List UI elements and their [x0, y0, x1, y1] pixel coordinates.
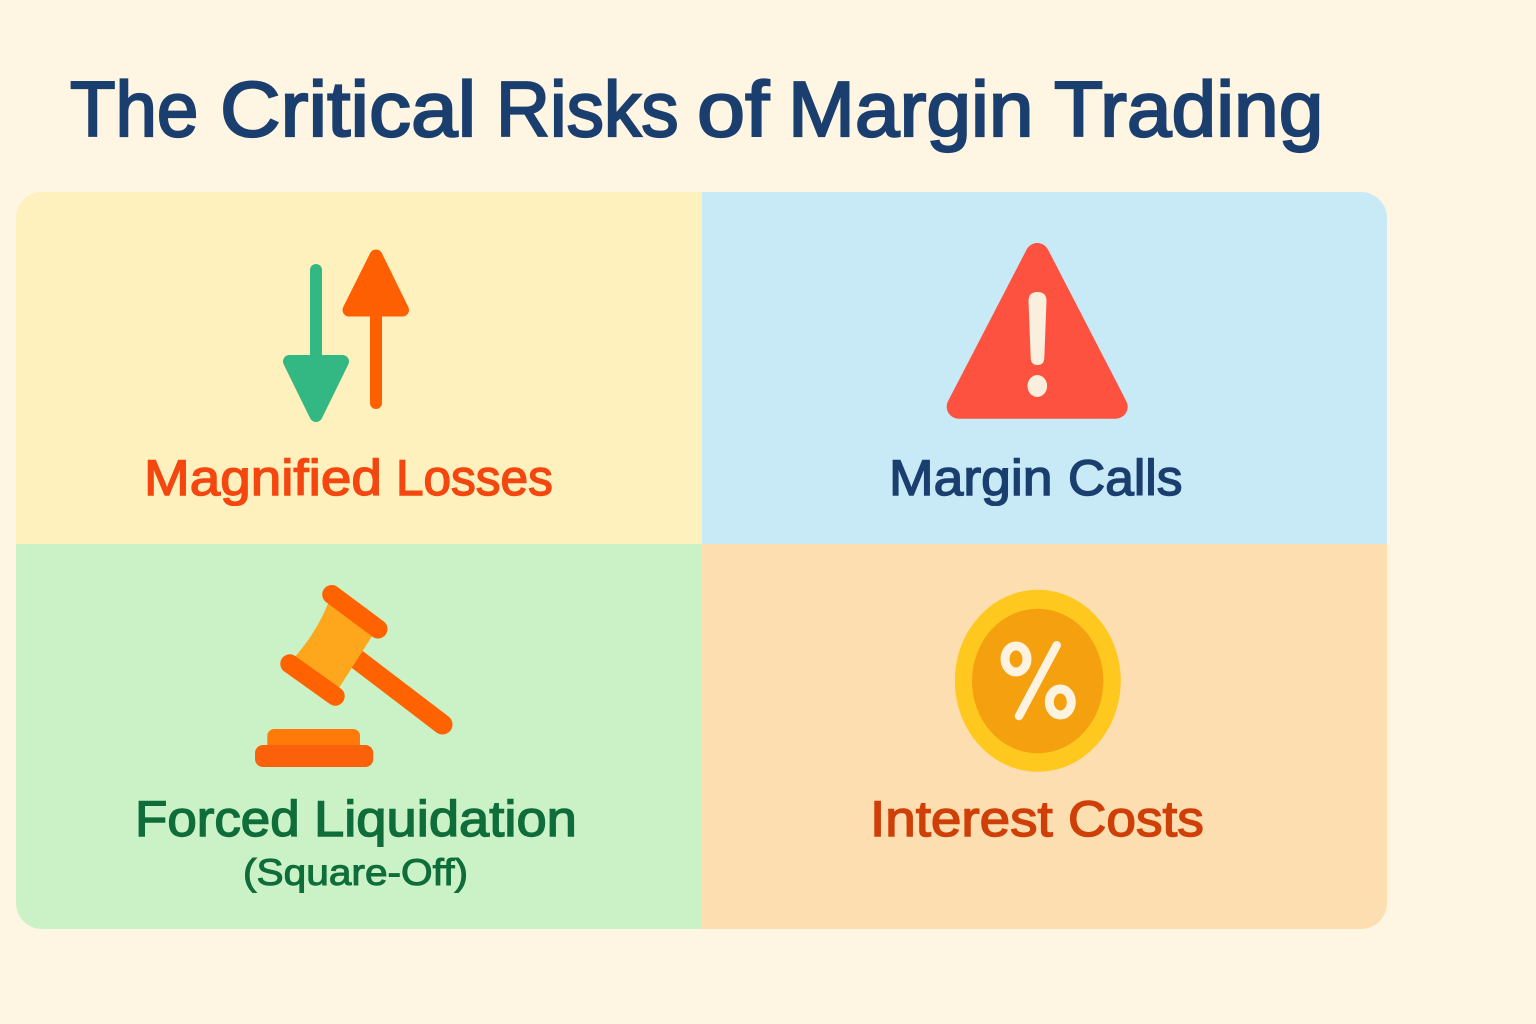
- heading: magnified losses: Losses: [396, 450, 553, 506]
- heading: margin calls: Calls: [1068, 450, 1182, 506]
- title: Critical: [220, 65, 476, 153]
- icon: warning triangle: [946, 243, 1128, 419]
- title: Margin: [788, 65, 1034, 153]
- heading: forced liquidation: Forced: [134, 791, 299, 847]
- heading: margin calls: [889, 450, 1182, 506]
- panel: risk grid: [16, 192, 1387, 929]
- title: Trading: [1054, 65, 1323, 153]
- heading: margin calls: Margin: [889, 450, 1053, 506]
- heading: forced liquidation: [134, 791, 577, 847]
- title: Risks: [496, 65, 679, 153]
- panel: margin calls: [702, 192, 1387, 544]
- title: [70, 65, 1323, 154]
- title: of: [697, 65, 769, 153]
- icon: up and down arrows: [283, 250, 409, 422]
- heading: interest costs: Costs: [1068, 791, 1204, 847]
- heading: interest costs: [870, 791, 1204, 847]
- heading: magnified losses: Magnified: [144, 450, 382, 506]
- icon: gavel: [255, 585, 452, 767]
- icon: percent coin: [954, 590, 1121, 772]
- heading: forced liquidation: Liquidation: [314, 791, 577, 847]
- panel: forced liquidation: [16, 544, 702, 929]
- heading: magnified losses: [144, 450, 553, 506]
- title: The: [70, 65, 198, 153]
- heading: interest costs: Interest: [870, 791, 1053, 847]
- subheading: square-off: (Square-Off): [243, 852, 468, 893]
- panel: interest costs: [702, 544, 1387, 929]
- panel: magnified losses: [16, 192, 702, 544]
